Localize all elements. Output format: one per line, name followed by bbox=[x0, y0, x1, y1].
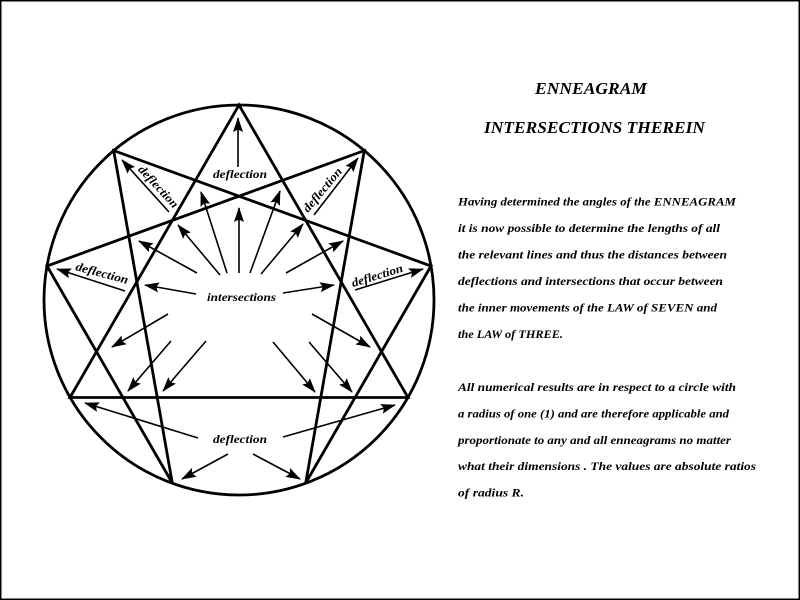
text block: second paragraph: of radius R. bbox=[458, 486, 524, 500]
label: deflection right: deflection bbox=[350, 261, 405, 290]
text block: first paragraph: it is now possible to determine the lengths of all bbox=[458, 221, 721, 235]
text block: second paragraph: All numerical results are in respect to a circle with bbox=[457, 380, 736, 394]
arrows from intersections label bbox=[112, 191, 370, 392]
text block: first paragraph: the relevant lines and thus the distances between bbox=[458, 248, 727, 262]
text block: first paragraph: Having determined the angles of the ENNEAGRAM bbox=[457, 194, 736, 208]
inner triangle: law of three bbox=[70, 105, 408, 398]
text block: second paragraph: a radius of one (1) and are therefore applicable and bbox=[458, 406, 730, 420]
text block: first paragraph: deflections and intersections that occur between bbox=[458, 274, 723, 288]
text block: second paragraph: proportionate to any and all enneagrams no matter bbox=[457, 433, 731, 447]
text block: second paragraph bbox=[457, 380, 756, 500]
label: deflection upper right: deflection bbox=[300, 164, 345, 215]
hexad figure: law of seven bbox=[47, 151, 431, 483]
text block: first paragraph: the LAW of THREE. bbox=[458, 327, 563, 341]
enclosing circle bbox=[44, 105, 434, 495]
label: deflection upper left: deflection bbox=[135, 162, 182, 211]
label: deflection bottom: deflection bbox=[213, 432, 267, 446]
text block: first paragraph bbox=[457, 194, 736, 341]
enneagram diagram bbox=[44, 105, 434, 495]
text block: first paragraph: the inner movements of the LAW of SEVEN and bbox=[458, 300, 718, 314]
label: deflection top: deflection bbox=[213, 167, 267, 181]
label: deflection left: deflection bbox=[74, 259, 130, 287]
title: ENNEAGRAM bbox=[534, 79, 648, 98]
label: intersections: intersections bbox=[207, 290, 276, 304]
title bbox=[483, 79, 706, 137]
text block: second paragraph: what their dimensions . The values are absolute ratios bbox=[458, 459, 756, 473]
title: INTERSECTIONS THEREIN bbox=[483, 118, 706, 137]
arrows from deflection labels bbox=[57, 118, 423, 479]
